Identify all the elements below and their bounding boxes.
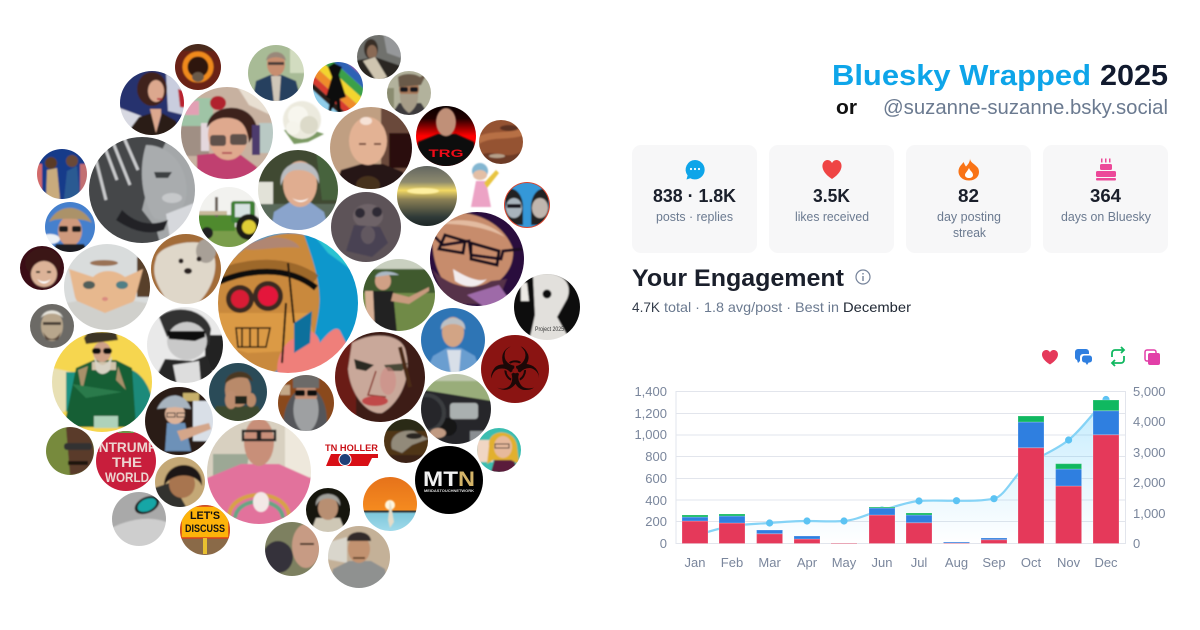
chart legend (1042, 347, 1160, 366)
icon: legend heart (1042, 350, 1058, 364)
card: days on Bluesky: 364 (1090, 186, 1121, 206)
avatar: steampunk man in green (52, 332, 152, 432)
avatar: bald man (330, 107, 412, 189)
left axis labels: 200 (645, 514, 667, 529)
card: posts and replies: posts · replies (656, 209, 733, 224)
avatar: woman with headset (181, 87, 273, 179)
sign lettering: DISCUSS (185, 523, 225, 535)
card: posts and replies: 838 · 1.8K (653, 186, 736, 206)
month labels: Dec (1094, 555, 1118, 570)
month labels: Mar (758, 555, 781, 570)
left axis labels: 600 (645, 471, 667, 486)
right axis labels (1133, 384, 1166, 551)
avatar: TN Holler logo (325, 443, 379, 466)
avatar: bearded man in hat (387, 71, 431, 115)
left axis labels: 800 (645, 449, 667, 464)
month labels: Jan (685, 555, 705, 570)
month labels: Apr (797, 555, 818, 570)
month labels: Feb (721, 555, 743, 570)
card: days on Bluesky (1043, 145, 1168, 253)
avatar: man with cow (262, 519, 322, 579)
avatar: old man with curly hair (304, 486, 352, 534)
avatar: white dog (151, 234, 221, 304)
month labels (685, 555, 1118, 570)
avatar cloud (17, 32, 582, 590)
avatar: sunset on water (360, 474, 420, 534)
avatar: grey cat eye (112, 492, 166, 546)
TRG label: TRG (428, 148, 464, 160)
avatar: robot with helmet, large (218, 233, 358, 373)
Project 2025 label: Project 2025 (535, 327, 565, 333)
avatar: painted face (332, 329, 428, 425)
heading: your engagement: Your Engagement (632, 265, 844, 292)
month labels: Sep (982, 555, 1006, 570)
icon: info (856, 270, 870, 284)
card: days on Bluesky: days on Bluesky (1061, 209, 1151, 224)
icon: legend reposts (1112, 347, 1124, 366)
card: streak (906, 145, 1031, 253)
avatar: Intrump the World (96, 431, 156, 491)
left axis labels: 1,400 (634, 384, 667, 399)
avatar: man with long grey beard (276, 373, 336, 433)
sign lettering (185, 510, 225, 535)
title: 2025 (1100, 60, 1168, 92)
icon: flame (958, 158, 979, 180)
engagement summary: total · 1.8 avg/post · Best in (664, 299, 839, 315)
avatar: mosaic man (30, 304, 74, 348)
avatar: brown texture (479, 120, 523, 164)
avatar: couple with flags (37, 149, 87, 199)
biohazard glyph: ☣ (488, 335, 542, 405)
left axis labels: 1,200 (634, 406, 667, 421)
left axis labels: 1,000 (634, 427, 667, 442)
avatar: grey child portrait (89, 137, 195, 243)
MTN wordmark: MT (423, 468, 458, 491)
cumulative line (695, 399, 1106, 536)
right axis labels: 3,000 (1133, 445, 1166, 460)
avatar: bald man with aviators (46, 427, 94, 475)
avatar: Let's Discuss sign (180, 505, 230, 555)
panel: stat cards (632, 145, 1168, 253)
avatar: raccoon (382, 417, 430, 465)
card: posts and replies (632, 145, 757, 253)
avatar: TRG man on red (416, 106, 476, 166)
avatar: MeidasTouch Network (413, 444, 485, 516)
avatar: sunset clouds (397, 166, 457, 226)
left axis labels: 0 (660, 536, 667, 551)
avatar: laughing man with glasses (430, 212, 524, 306)
avatar: green tractor (199, 187, 259, 247)
avatar: MeidasTouch Network: MEIDASTOUCHNETWORK (424, 488, 474, 493)
avatar: boy with hat (145, 387, 213, 455)
month labels: Oct (1021, 555, 1041, 570)
avatar: rainbow with silhouette (313, 62, 363, 112)
avatar: George Takei (258, 150, 338, 230)
left axis labels (634, 384, 667, 551)
avatar: man in suit (248, 45, 304, 101)
TN HOLLER wordmark: TN HOLLER (325, 443, 379, 453)
icon: legend quotes (1145, 350, 1160, 365)
avatar: car dashboard (408, 371, 494, 447)
right axis labels: 0 (1133, 536, 1140, 551)
avatar: two faces on blue (504, 182, 550, 228)
card: likes (769, 145, 894, 253)
sign lettering: LET'S (190, 510, 220, 522)
cumulative area (695, 399, 1106, 544)
left axis labels: 400 (645, 493, 667, 508)
avatar: biohazard (479, 333, 551, 405)
card: likes: 3.5K (813, 186, 850, 206)
right axis labels: 5,000 (1133, 384, 1166, 399)
avatar: man pointing (363, 259, 435, 331)
avatar: woman with flag (120, 71, 184, 135)
avatar: flaming skull (175, 44, 221, 90)
month labels: Jul (911, 555, 927, 570)
month labels: Aug (945, 555, 968, 570)
avatar: orange cat (64, 244, 150, 330)
avatar: blonde cartoon (475, 426, 523, 474)
card: streak: 82 (958, 186, 979, 206)
avatar: owl sketch (331, 192, 401, 262)
chart: engagement by month (634, 384, 1166, 570)
avatar: smiling kid (20, 246, 64, 290)
icon: legend replies (1075, 349, 1092, 365)
right axis labels: 1,000 (1133, 506, 1166, 521)
avatar: man in blue blazer (418, 305, 488, 375)
month labels: Nov (1057, 555, 1081, 570)
avatar: man in hat and sunglasses (45, 202, 95, 252)
gridlines (676, 391, 1126, 544)
INTRUMP THE WORLD lettering: INTRUMP (95, 439, 157, 455)
avatar: cartoon granny sticker (471, 163, 499, 207)
handle line: or (836, 97, 857, 119)
INTRUMP THE WORLD lettering: THE (112, 454, 142, 470)
avatar: MeidasTouch Network: N (458, 468, 475, 491)
month labels: May (832, 555, 857, 570)
month labels: Jun (872, 555, 892, 570)
avatar: black and white man with sunglasses (145, 305, 225, 385)
icon: cake (1096, 158, 1116, 180)
handle line: @suzanne-suzanne.bsky.social (883, 97, 1168, 119)
card: streak: day posting (937, 209, 1001, 224)
cumulative markers (766, 396, 1110, 527)
avatar: man with hands at chin (209, 363, 267, 421)
avatar: man with scarf (357, 35, 401, 79)
avatar: man looking down (155, 457, 205, 507)
card: streak: streak (953, 225, 986, 240)
title: Bluesky Wrapped (832, 60, 1091, 92)
engagement summary: 4.7K (632, 299, 661, 315)
avatar: white rose (283, 101, 324, 144)
INTRUMP THE WORLD lettering (98, 442, 153, 482)
avatar: man in cap and grey hoodie (326, 524, 392, 590)
avatar: black and white portrait, Project 2025 (514, 274, 580, 340)
icon: heart (822, 160, 842, 179)
INTRUMP THE WORLD lettering: WORLD (105, 469, 149, 485)
icon: chat bubble (686, 160, 705, 180)
right axis labels: 2,000 (1133, 475, 1166, 490)
engagement summary (632, 299, 911, 315)
right axis labels: 4,000 (1133, 414, 1166, 429)
card: likes: likes received (795, 209, 869, 224)
avatar: man in pink unicorn shirt (207, 420, 311, 524)
bars: stacked monthly (682, 400, 1119, 544)
engagement summary: December (843, 299, 911, 315)
